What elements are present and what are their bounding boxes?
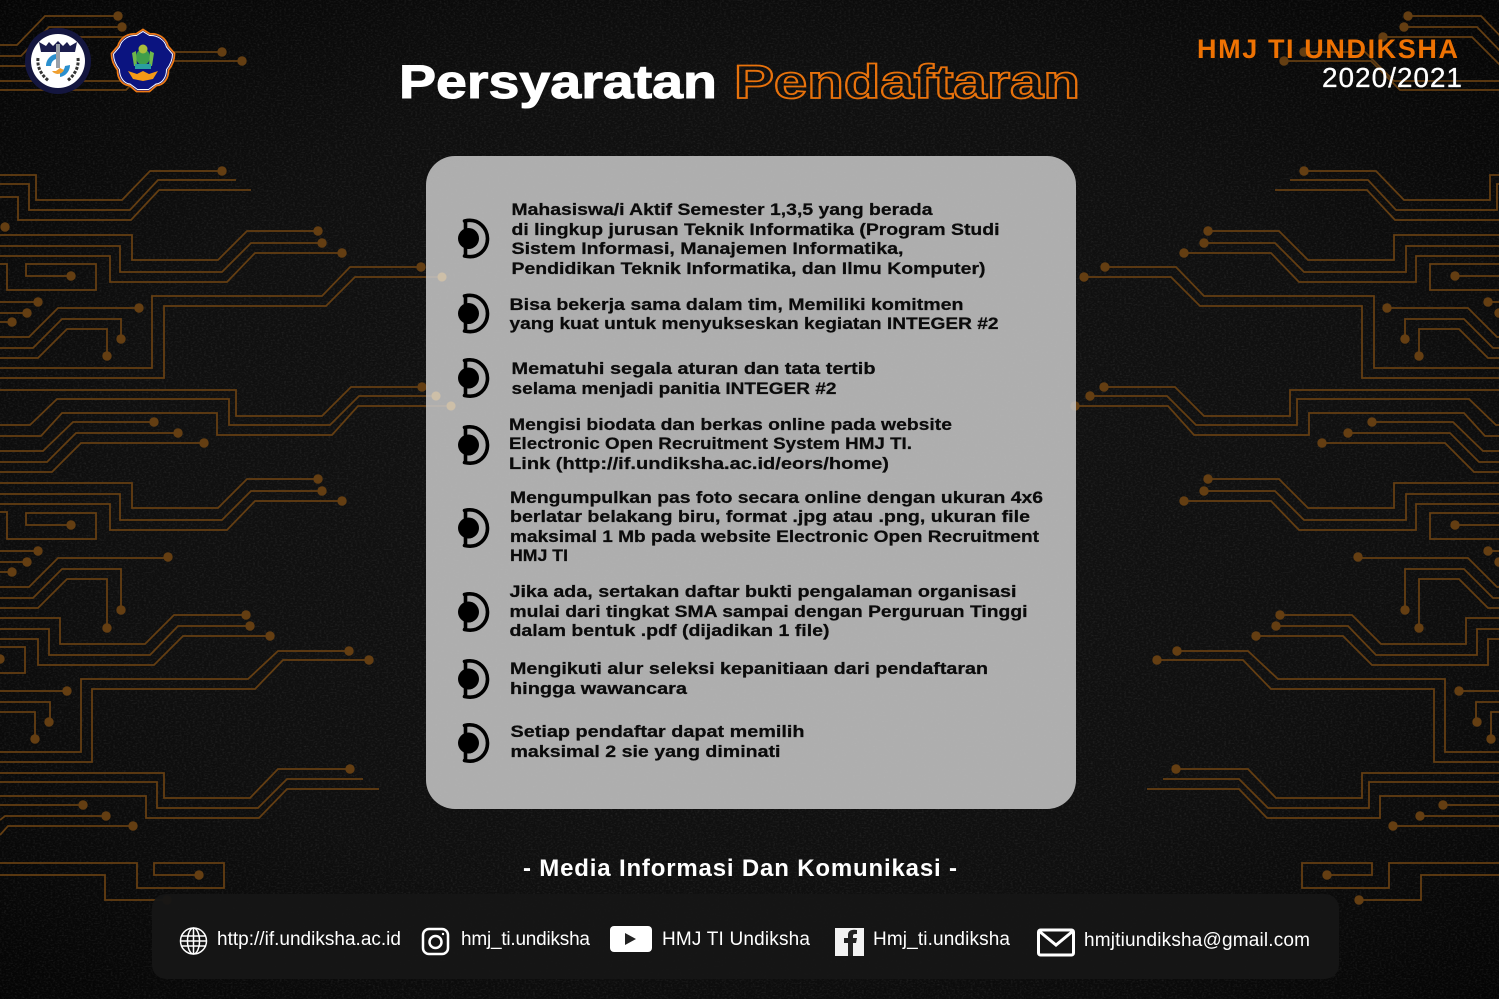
item 5: Mengumpulkan pas foto secara online dengan ukuran 4x6: [510, 488, 1043, 507]
title: Pendaftaran: [734, 55, 1080, 108]
footer bar: [152, 894, 1339, 979]
item 3: selama menjadi panitia INTEGER #2: [512, 379, 836, 398]
item 5: [458, 488, 1043, 565]
footer background: [152, 894, 1339, 979]
item 1: Sistem Informasi, Manajemen Informatika,: [512, 239, 904, 258]
item 1: [458, 200, 1000, 278]
item 7: hingga wawancara: [510, 679, 688, 698]
item 8: Setiap pendaftar dapat memilih: [510, 722, 804, 741]
panel: requirements: [426, 156, 1076, 809]
item 7: [458, 659, 988, 698]
item 6: dalam bentuk .pdf (dijadikan 1 file): [510, 621, 830, 640]
icon: facebook: [835, 928, 864, 956]
item 6: Jika ada, sertakan daftar bukti pengalaman organisasi: [510, 582, 1016, 601]
item 8: [458, 722, 804, 761]
logo: HMJ TI crest: [25, 28, 91, 94]
circuit traces right: [1070, 11, 1500, 905]
item 5: berlatar belakang biru, format .jpg atau .png, ukuran file: [510, 507, 1030, 526]
item 1: Mahasiswa/i Aktif Semester 1,3,5 yang berada: [512, 200, 933, 219]
logo: Undiksha crest: [112, 30, 174, 92]
icon: mail: [1038, 930, 1074, 955]
organisation name and period: HMJ TI UNDIKSHA: [1197, 34, 1458, 64]
website: http://if.undiksha.ac.id: [217, 929, 401, 950]
youtube channel: HMJ TI Undiksha: [662, 929, 810, 950]
faint trace dots: [432, 272, 456, 410]
panel background: [426, 156, 1076, 809]
item 3: [458, 359, 876, 398]
item 8: maksimal 2 sie yang diminati: [510, 742, 780, 761]
icon: instagram: [423, 929, 448, 954]
title: [399, 55, 1080, 108]
item 4: Link (http://if.undiksha.ac.id/eors/home): [509, 454, 889, 473]
item 4: Mengisi biodata dan berkas online pada website: [509, 415, 952, 434]
icon: youtube: [610, 926, 652, 952]
item 3: Mematuhi segala aturan dan tata tertib: [512, 359, 876, 378]
circuit traces left: [0, 11, 456, 905]
item 6: mulai dari tingkat SMA sampai dengan Perguruan Tinggi: [510, 602, 1028, 621]
instagram handle: hmj_ti.undiksha: [461, 929, 590, 950]
item 1: Pendidikan Teknik Informatika, dan Ilmu Komputer): [512, 259, 986, 278]
organisation name and period: 2020/2021: [1322, 62, 1462, 93]
email: hmjtiundiksha@gmail.com: [1084, 930, 1310, 951]
icon: globe: [180, 928, 206, 954]
item 7: Mengikuti alur seleksi kepanitiaan dari pendaftaran: [510, 659, 988, 678]
organisation name and period: [1197, 34, 1462, 93]
item 2: [458, 295, 998, 333]
item 4: [458, 415, 952, 473]
item 5: HMJ TI: [510, 546, 568, 565]
item 2: Bisa bekerja sama dalam tim, Memiliki komitmen: [510, 295, 964, 314]
title: Persyaratan: [399, 55, 717, 108]
facebook page: Hmj_ti.undiksha: [873, 929, 1010, 950]
item 5: maksimal 1 Mb pada website Electronic Open Recruitment: [510, 527, 1039, 546]
item 6: [458, 582, 1028, 640]
item 4: Electronic Open Recruitment System HMJ TI.: [509, 434, 912, 453]
footer heading: - Media Informasi Dan Komunikasi -: [523, 855, 957, 882]
item 2: yang kuat untuk menyukseskan kegiatan INTEGER #2: [510, 314, 998, 333]
item 1: di lingkup jurusan Teknik Informatika (Program Studi: [512, 220, 1000, 239]
